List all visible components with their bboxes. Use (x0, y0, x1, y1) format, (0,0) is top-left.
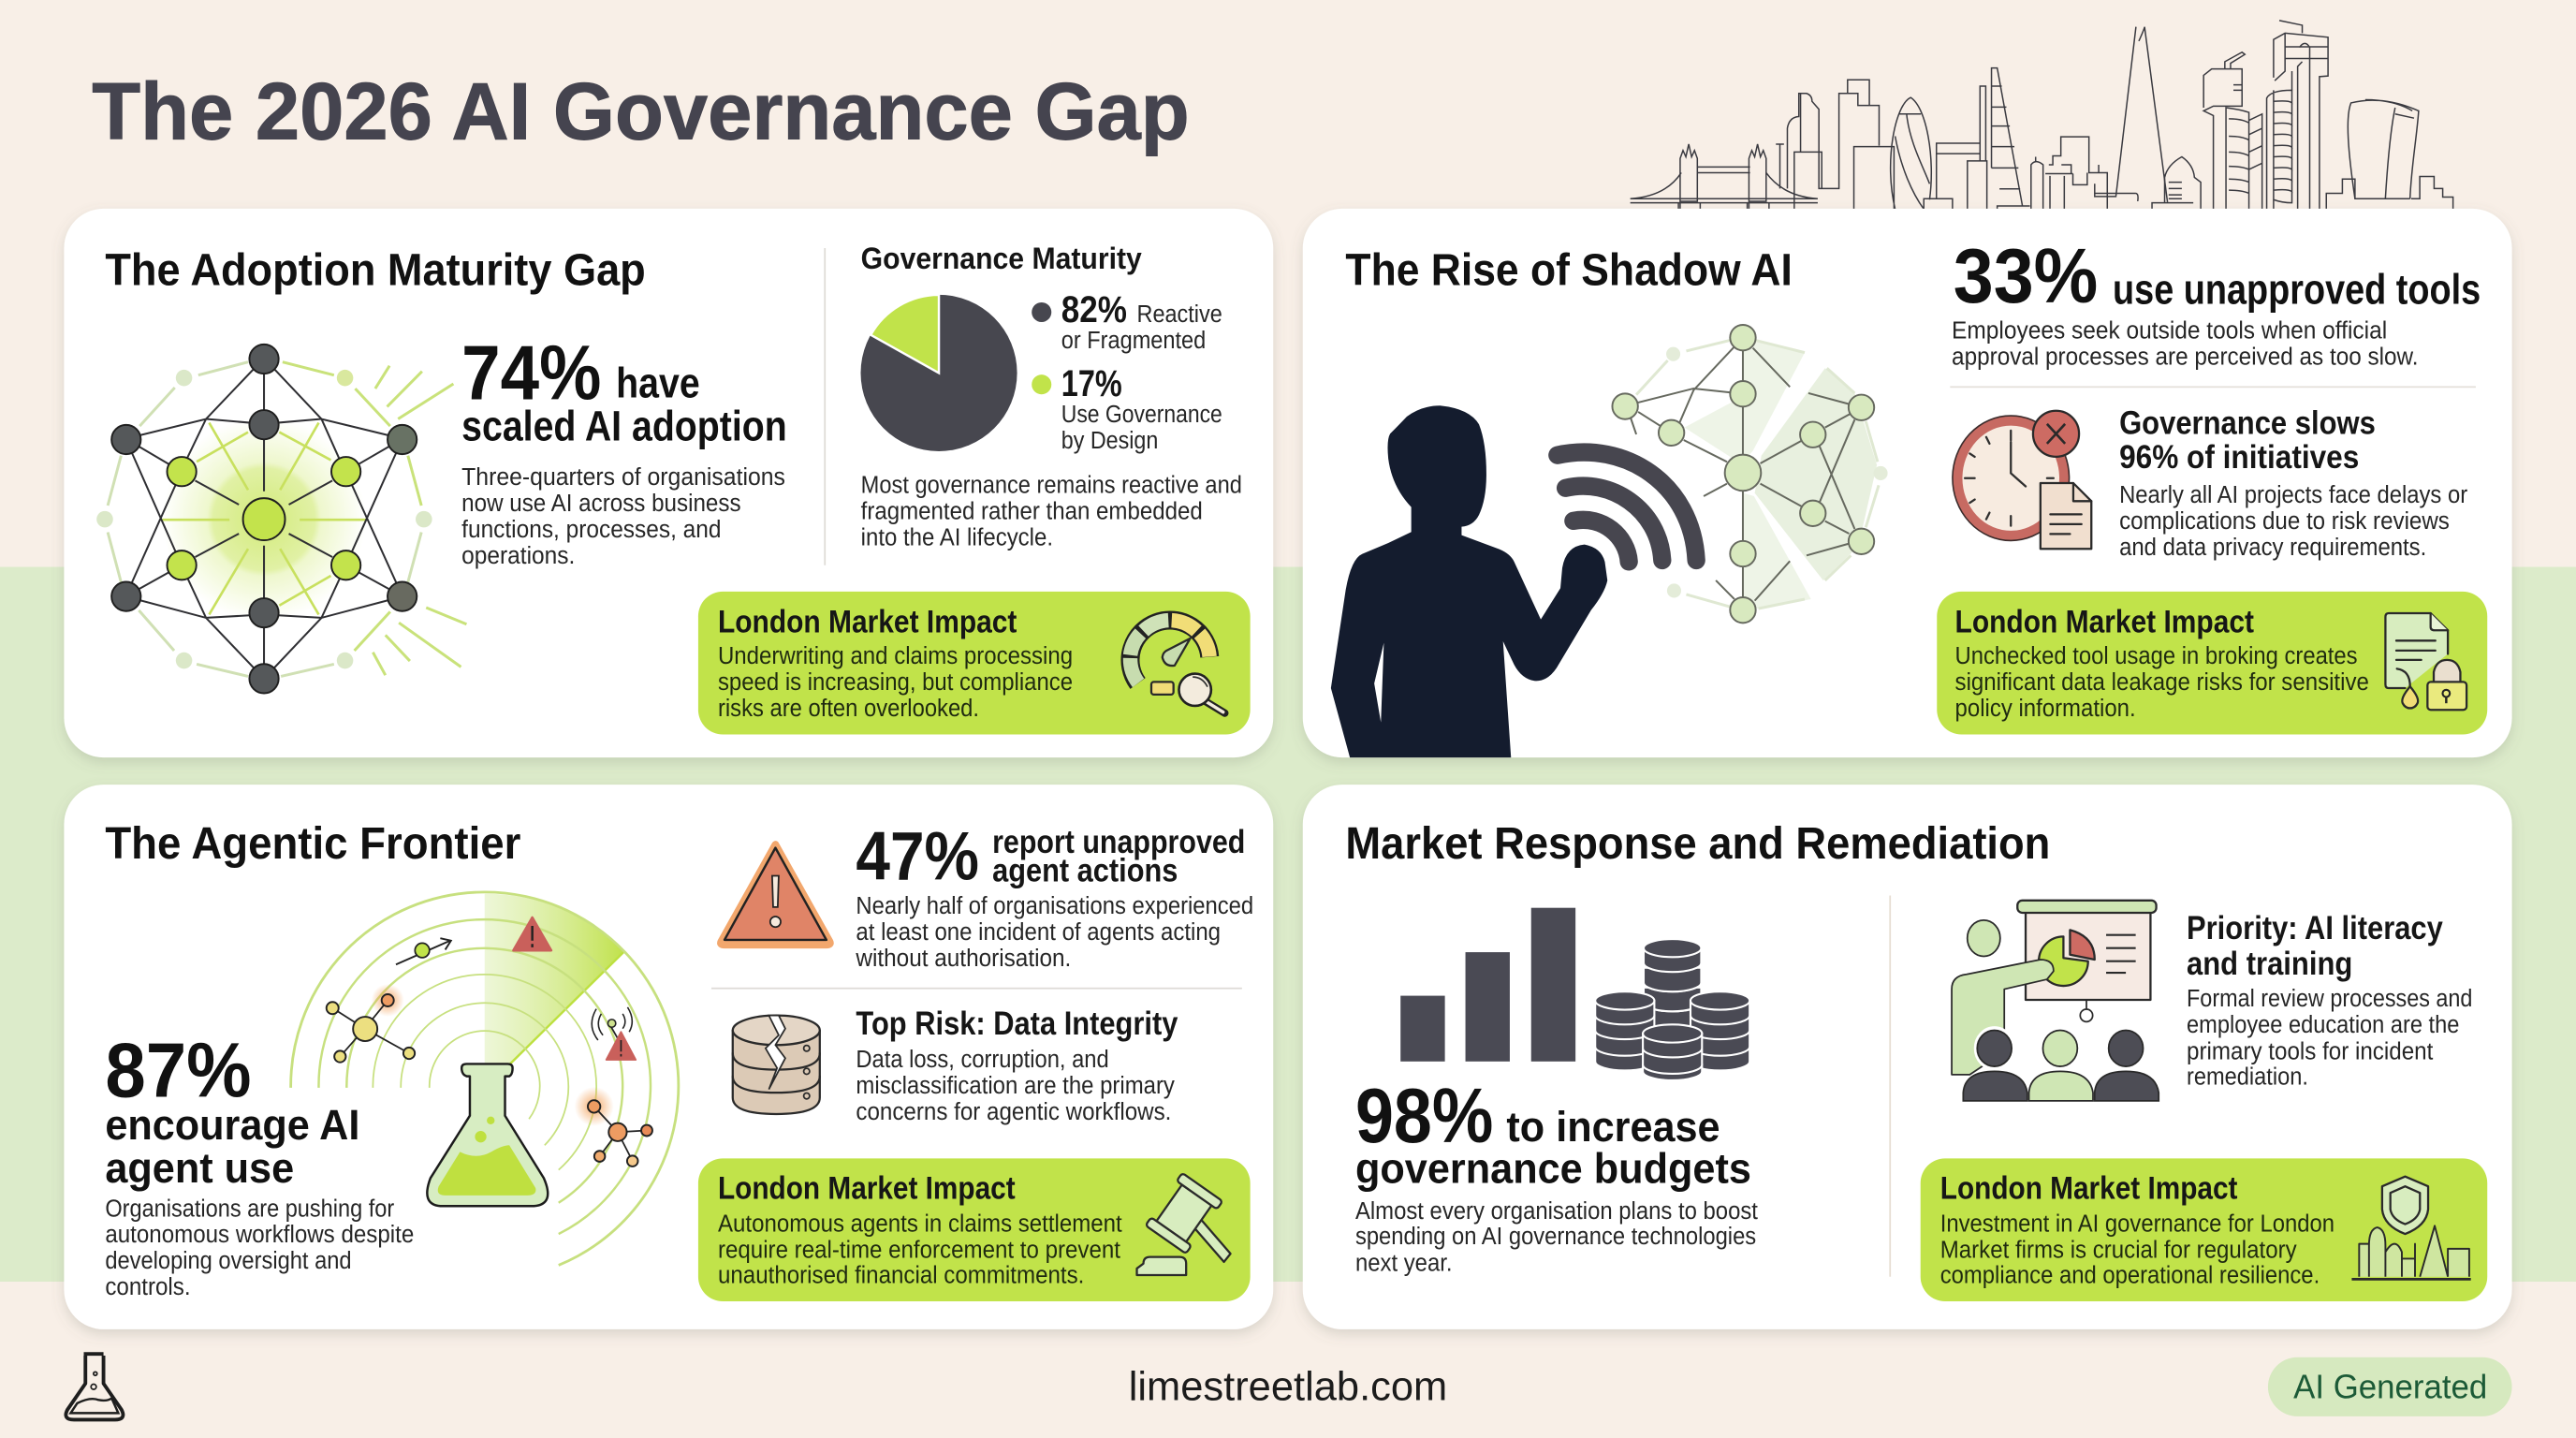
text: adoption description: functions, processes, and (461, 517, 721, 543)
icon: clock and document (1953, 411, 2091, 549)
callout: london market impact 4: Investment in AI governance for London (1940, 1211, 2334, 1237)
text: governance description: into the AI lifecycle. (861, 525, 1053, 551)
stat: 98% governance budgets (1355, 1073, 1751, 1193)
text: agentic description: controls. (105, 1274, 191, 1300)
text: top risk data integrity: Top Risk: Data Integrity (856, 1005, 1178, 1042)
icon: orange molecule (575, 1087, 652, 1167)
text: budgets description: next year. (1355, 1251, 1453, 1277)
stat: 74% scaled AI adoption (461, 330, 787, 449)
text: agentic description: autonomous workflows despite (105, 1222, 414, 1248)
callout: london market impact 3: unauthorised financial commitments. (718, 1263, 1084, 1289)
icon: warning triangle large (721, 844, 830, 945)
text: adoption description: operations. (461, 543, 575, 569)
callout: london market impact 3: Autonomous agents in claims settlement (718, 1211, 1122, 1237)
text: priority AI literacy (2187, 910, 2472, 1090)
stat: 87% encourage AI agent use: 87% (105, 1028, 252, 1114)
text: priority AI literacy: remediation. (2187, 1064, 2308, 1090)
panel: agentic frontier (64, 785, 1273, 1329)
icon: node with arrow (396, 938, 451, 964)
callout: london market impact 2: London Market Impact (1955, 605, 2254, 640)
icon: network diagram (96, 345, 466, 693)
stat: 74% scaled AI adoption: 74% (461, 330, 601, 416)
icon: signal with warning (592, 1007, 636, 1060)
footer: website: limestreetlab.com (1129, 1363, 1447, 1409)
callout: london market impact 2: significant data leakage risks for sensitive (1955, 669, 2369, 696)
panel: rise of shadow AI (1303, 209, 2512, 760)
icon: shield over city (2351, 1177, 2471, 1279)
legend: 17% by design: by Design (1061, 428, 1158, 454)
icon: presenter and audience (1952, 901, 2159, 1101)
legend: 82% reactive: or Fragmented (1061, 328, 1206, 354)
text: top risk data integrity: Data loss, corruption, and (856, 1047, 1109, 1073)
stat: 74% scaled AI adoption: scaled AI adoption (461, 402, 787, 449)
icon: gavel (1137, 1173, 1231, 1275)
stat: 33% unapproved tools: 33% (1954, 233, 2098, 319)
text: adoption description: now use AI across business (461, 491, 741, 517)
callout: london market impact 1 (698, 592, 1251, 735)
text: governance slows (2119, 404, 2468, 561)
callout: london market impact 4: compliance and operational resilience. (1940, 1263, 2320, 1289)
text: incident description (855, 893, 1253, 972)
icon: document with lock (2385, 613, 2466, 710)
chart: rising bars (1400, 908, 1575, 1062)
icon: coin stacks (1595, 939, 1749, 1080)
stat: 98% governance budgets: to increase (1506, 1103, 1720, 1151)
heading: agentic frontier: The Agentic Frontier (105, 818, 521, 869)
text: agentic description: Organisations are pushing for (105, 1196, 395, 1222)
text: governance slows: Nearly all AI projects face delays or (2119, 482, 2468, 508)
London skyline line art (1631, 21, 2453, 213)
text: top risk data integrity: misclassification are the primary (856, 1073, 1175, 1099)
heading: adoption maturity gap: The Adoption Maturity Gap (105, 245, 646, 296)
icon: network nodes (1612, 325, 1888, 623)
heading: governance maturity: Governance Maturity (861, 242, 1142, 275)
text: priority AI literacy: primary tools for incident (2187, 1038, 2433, 1064)
text: priority AI literacy: and training (2187, 946, 2352, 982)
stat: 87% encourage AI agent use (105, 1028, 359, 1192)
panel: adoption maturity gap (64, 209, 1273, 757)
icon: signal waves (1558, 452, 1696, 562)
icon: cracked database (733, 1016, 820, 1114)
icon: yellow molecule (327, 984, 415, 1063)
stat: 47% unapproved agent actions: agent actions (992, 852, 1178, 888)
pie chart: 82 / 17 (860, 295, 1017, 451)
stat: 47% unapproved agent actions: report unapproved (992, 824, 1245, 860)
chart: radar with flask (291, 892, 679, 1265)
icon: fractured network (1631, 338, 1879, 610)
text: governance slows: complications due to risk reviews (2119, 508, 2450, 535)
text: priority AI literacy: Priority: AI literacy (2187, 910, 2443, 946)
footer: flask logo (66, 1354, 123, 1419)
text: adoption description (461, 464, 785, 569)
callout: london market impact 3: London Market Impact (718, 1170, 1016, 1206)
text: agentic description: developing oversight and (105, 1248, 352, 1274)
callout: london market impact 3: require real-time enforcement to prevent (718, 1237, 1120, 1263)
stat: 98% governance budgets: 98% (1355, 1073, 1493, 1159)
legend: 82% reactive: 82% (1061, 289, 1127, 330)
text: priority AI literacy: employee education are the (2187, 1012, 2459, 1038)
icon: person silhouette (1331, 405, 1607, 760)
text: priority AI literacy: Formal review processes and (2187, 986, 2472, 1012)
callout: london market impact 2: Unchecked tool usage in broking creates (1955, 643, 2358, 669)
text: governance description: fragmented rather than embedded (861, 499, 1203, 525)
callout: london market impact 1: London Market Impact (718, 605, 1017, 640)
text: incident description: Nearly half of organisations experienced (856, 893, 1253, 919)
stat: 98% governance budgets: governance budgets (1355, 1145, 1751, 1193)
text: governance description: Most governance remains reactive and (861, 473, 1242, 499)
text: governance slows: Governance slows (2119, 404, 2376, 441)
stat: 74% scaled AI adoption: have (616, 360, 700, 407)
text: shadow description: approval processes are perceived as too slow. (1952, 345, 2419, 371)
title: The 2026 AI Governance Gap (92, 66, 1190, 156)
text: budgets description: Almost every organisation plans to boost (1355, 1198, 1758, 1225)
text: governance slows: 96% of initiatives (2119, 439, 2359, 476)
text: agentic description (105, 1196, 414, 1300)
text: top risk data integrity (856, 1005, 1178, 1125)
callout: london market impact 4: London Market Impact (1940, 1170, 2237, 1206)
stat: 33% unapproved tools: use unapproved tools (2113, 266, 2481, 314)
stat: 47% unapproved agent actions (856, 817, 1245, 895)
icon: warning triangle small (513, 917, 551, 950)
callout: london market impact 4: Market firms is crucial for regulatory (1940, 1237, 2297, 1263)
stat: 87% encourage AI agent use: agent use (105, 1144, 294, 1192)
text: governance slows: and data privacy requirements. (2119, 535, 2426, 561)
legend: 17% by design (1032, 363, 1222, 454)
icon: gauge with magnifier (1130, 620, 1224, 713)
stat: 87% encourage AI agent use: encourage AI (105, 1101, 359, 1149)
panel: market response and remediation (1303, 785, 2512, 1329)
text: adoption description: Three-quarters of organisations (461, 464, 785, 491)
heading: market response: Market Response and Remediation (1345, 818, 2050, 869)
legend: 17% by design: Use Governance (1061, 402, 1222, 428)
callout: london market impact 1: Underwriting and claims processing (718, 643, 1073, 669)
callout: london market impact 2: policy information. (1955, 696, 2136, 722)
legend: 82% reactive (1032, 289, 1222, 354)
text: top risk data integrity: concerns for agentic workflows. (856, 1099, 1171, 1125)
text: governance description (861, 473, 1242, 551)
text: shadow description: Employees seek outside tools when official (1952, 318, 2387, 345)
callout: london market impact 1: risks are often overlooked. (718, 696, 979, 722)
stat: 33% unapproved tools (1954, 233, 2481, 319)
text: incident description: at least one incident of agents acting (856, 919, 1221, 946)
text: budgets description (1355, 1198, 1758, 1277)
badge: AI generated (2268, 1357, 2512, 1416)
text: incident description: without authorisation. (855, 946, 1071, 972)
legend: 82% reactive: Reactive (1137, 301, 1222, 328)
badge: AI generated: AI Generated (2293, 1368, 2487, 1406)
legend: 17% by design: 17% (1061, 363, 1122, 404)
icon: flask (427, 1064, 548, 1206)
callout: london market impact 2 (1937, 592, 2487, 735)
stat: 47% unapproved agent actions: 47% (856, 817, 979, 895)
text: budgets description: spending on AI governance technologies (1355, 1224, 1756, 1250)
text: shadow description (1952, 318, 2419, 371)
heading: rise of shadow AI: The Rise of Shadow AI (1345, 245, 1793, 296)
callout: london market impact 3 (698, 1158, 1251, 1301)
callout: london market impact 1: speed is increasing, but compliance (718, 669, 1073, 696)
callout: london market impact 4 (1921, 1158, 2487, 1301)
